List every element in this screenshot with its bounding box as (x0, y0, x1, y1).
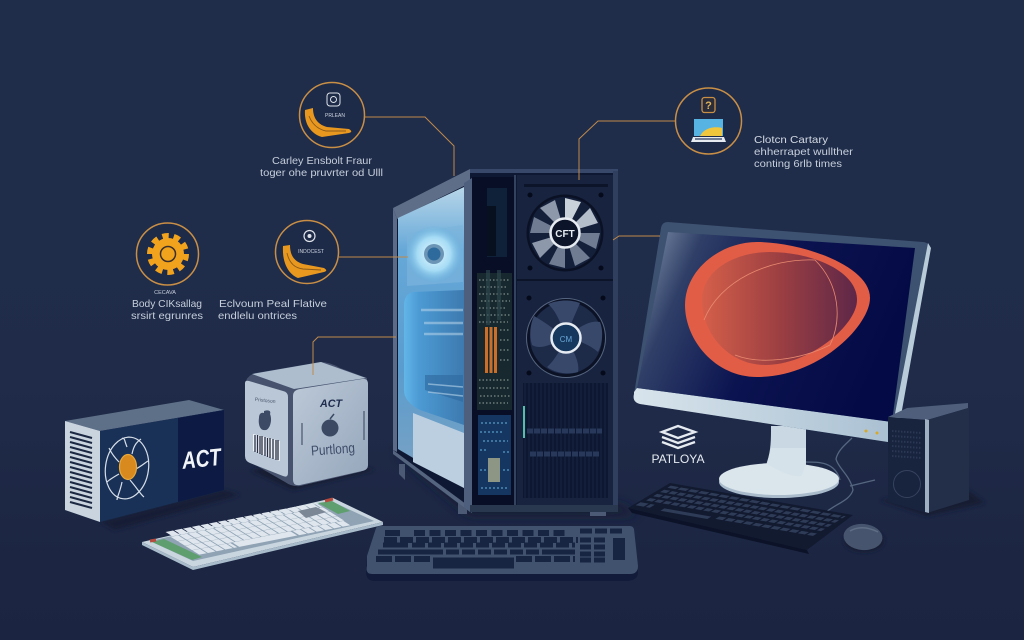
keycaps (167, 505, 348, 552)
power supply box (65, 400, 240, 530)
shadow (250, 462, 375, 490)
motherboard (472, 177, 515, 507)
tower top bevel and side frame (393, 169, 618, 512)
connector lines (313, 117, 675, 375)
callout: mid left (218, 220, 338, 322)
vertical divider (514, 175, 516, 505)
text: top right caption (754, 134, 854, 170)
text: top right caption: Clotcn Cartary (754, 134, 829, 146)
center keyboard (366, 526, 638, 581)
text: gear caption: srsirt egrunres (131, 311, 203, 322)
icon: laptop circle: ? (705, 100, 712, 112)
front panel (517, 175, 613, 505)
PSU side vents (65, 421, 100, 522)
icon: wrench circle small: INDOCEST (298, 249, 324, 255)
cube box (245, 362, 375, 490)
icon: laptop circle (676, 88, 742, 154)
text: top right caption: conting 6rlb times (754, 158, 842, 170)
icon: gear circle (136, 223, 198, 285)
screen (637, 232, 915, 422)
bottom fan (526, 298, 606, 378)
tower shadow (393, 450, 640, 515)
PSU ACT logo: ACT (180, 444, 224, 475)
text: mid left caption (218, 298, 327, 322)
text: top right caption: ehherrapet wullther (754, 146, 854, 158)
tower PC (393, 169, 640, 516)
keyboard body (366, 526, 638, 581)
fan screws (529, 195, 603, 373)
keyboard body (628, 483, 853, 550)
bottom fan: CM (560, 335, 573, 344)
PATLOYA logo (652, 426, 704, 466)
callout: top left (260, 82, 383, 179)
blue glow panel (404, 290, 464, 425)
mouse (842, 522, 884, 552)
text: mid left caption: endlelu ontrices (218, 311, 297, 322)
icon: wrench circle: PRLEAN (325, 113, 345, 119)
text: gear caption: CECAVA (154, 290, 176, 296)
orange heat pipes (486, 327, 496, 373)
bottom grille (523, 383, 608, 498)
monitor frame (634, 222, 930, 442)
key rows (376, 531, 625, 563)
text: top left caption: Carley Ensbolt Fraur (272, 155, 373, 167)
cable (805, 438, 875, 512)
cube body (245, 362, 367, 486)
PSU front (100, 410, 224, 522)
bezel bottom (634, 388, 897, 442)
cube left face: Pristoson (254, 397, 276, 405)
speaker (880, 403, 985, 516)
right tower edge (613, 171, 618, 510)
white mechanical keyboard (142, 498, 383, 570)
glowing fan (406, 226, 462, 282)
glass panel (398, 187, 464, 488)
keyboard base (142, 498, 383, 567)
text: top left caption (260, 155, 383, 179)
cube right face (293, 379, 368, 485)
drive bay (413, 413, 464, 488)
right keyboard (628, 483, 853, 554)
monitor base (719, 466, 839, 498)
callout: top right (676, 88, 854, 170)
text: mid left caption: Eclvoum Peal Flative (219, 298, 327, 310)
indicator lights (866, 431, 877, 433)
cube right face: Purtlong (310, 439, 355, 459)
monitor (634, 222, 931, 512)
key rows (636, 486, 844, 536)
PATLOYA logo: PATLOYA (652, 452, 704, 466)
text: gear caption: Body CIKsallag (132, 298, 202, 310)
top fan: CFT (555, 229, 575, 240)
screen blob (685, 242, 870, 377)
green circuit strips (152, 501, 350, 560)
callout: gear (131, 223, 203, 322)
monitor stand neck (766, 426, 806, 479)
PSU fan (101, 434, 153, 502)
text: gear caption (131, 290, 203, 322)
text: top left caption: toger ohe pruvrter od Ulll (260, 167, 383, 179)
PSU top (65, 400, 224, 431)
shadow (100, 490, 240, 530)
status light (523, 406, 525, 438)
cube right face: ACT (319, 398, 343, 410)
tower feet (399, 464, 606, 516)
top fan (526, 194, 604, 272)
